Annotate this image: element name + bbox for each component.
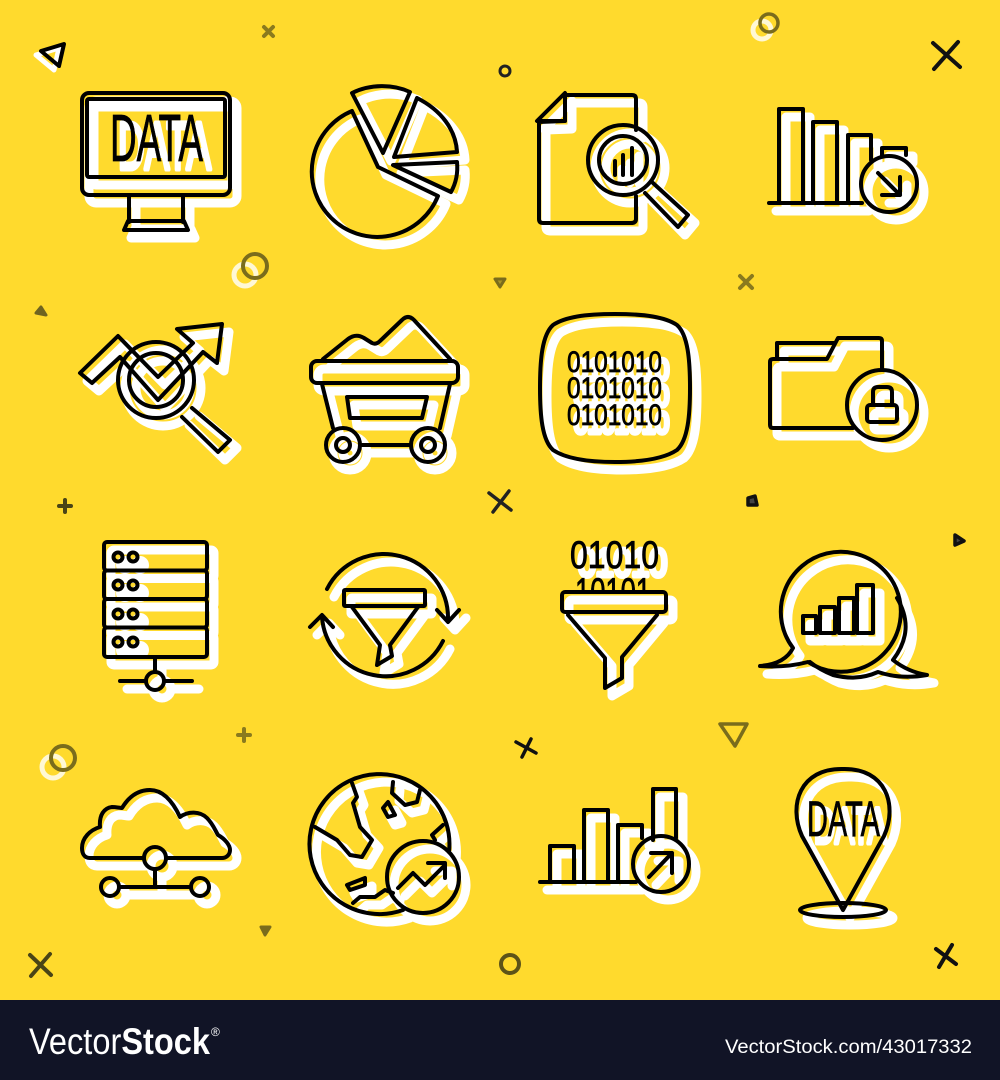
icon: data location pin: DATA [807,791,880,847]
icon: binary code chip: 0101010 [567,346,662,379]
icon: data location pin [796,769,897,925]
icon: document with magnifier [537,93,695,235]
icon: binary code chip: 0101010 [574,380,669,413]
icon: pie chart [312,86,465,245]
icon: globe with growth chart [309,774,466,922]
icon: data monitor [82,93,237,238]
icon: data monitor: DATA [118,109,211,184]
icon: binary code chip [540,314,697,470]
icon: data monitor: DATA [110,101,203,176]
icon: falling bar chart [769,109,924,220]
icon: funnel with refresh arrows [310,554,466,684]
icon: trend arrow with magnifier [80,324,237,460]
icon: binary data funnel: 01010 [570,534,659,577]
icon: rising bar chart [540,789,696,900]
icon: data location pin: DATA [814,798,887,854]
icon: binary code chip: 0101010 [567,372,662,405]
image id: VectorStock.com/43017332 [725,1037,972,1058]
footer bar [0,1000,1000,1080]
icon: server network [104,542,214,698]
icon: binary data funnel: 10101 [575,571,651,614]
icon: mine cart [311,317,465,470]
icon: binary code chip: 0101010 [574,354,669,387]
registered mark: ® [211,1025,220,1039]
icon: locked folder [770,338,924,448]
icon: binary data funnel: 01010 [578,542,667,585]
icon: binary data funnel [562,534,673,696]
icon: binary code chip: 0101010 [567,399,662,432]
icon: speech bubbles with bar chart [760,552,934,686]
icon: cloud network [82,790,237,904]
icon: binary code chip: 0101010 [574,407,669,440]
logo: VectorStock: VectorStock [29,1021,210,1062]
